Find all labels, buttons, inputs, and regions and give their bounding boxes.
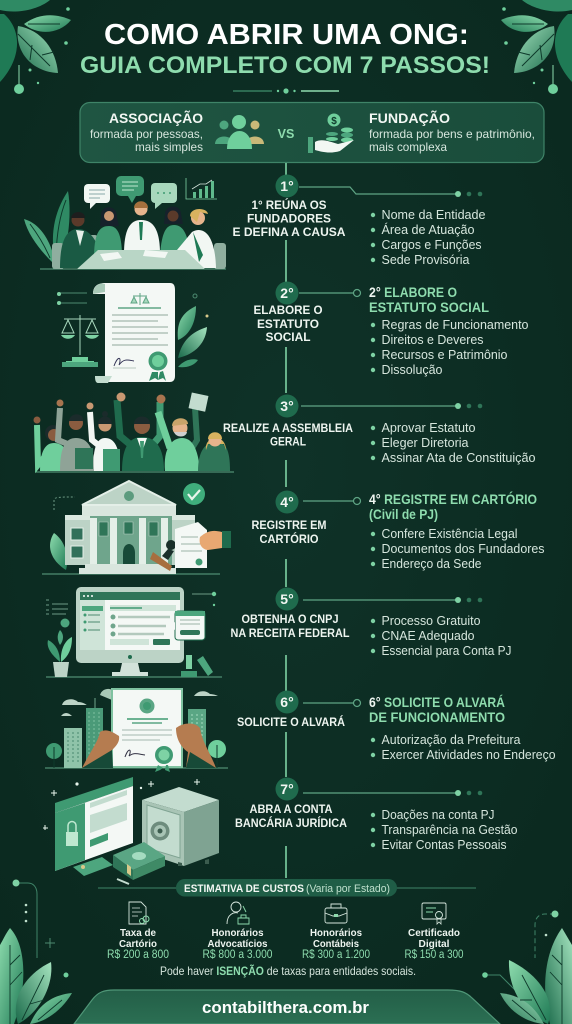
text: step 1 badge and title: 1° [280,178,294,194]
connector: step 3 [301,403,482,409]
text: step 7 badge and title [235,778,347,830]
text: fundação: mais complexa [369,140,447,154]
list: step 5: Processo Gratuito [382,614,481,628]
list: step 3 [371,421,536,465]
heading and list: step 6: Exercer Atividades no Endereço [382,748,556,762]
title [80,19,490,79]
list: step 5: Essencial para Conta PJ [382,644,512,658]
text: step 6 badge and title: SOLICITE O ALVARÁ [237,714,345,729]
cost item: certificado digital: R$ 150 a 300 [404,949,464,961]
title: GUIA COMPLETO COM 7 PASSOS! [80,52,490,79]
list: step 1 [371,208,486,267]
text: step 3 badge and title [223,394,353,448]
text: fundação: FUNDAÇÃO [369,109,450,126]
text: associação: ASSOCIAÇÃO [109,109,203,126]
note: tax exemption: Pode haver ISENÇÃO de taxas para entidades sociais. [160,963,416,978]
decoration: bottom-right leaves [482,910,572,1024]
text: step 6 badge and title [237,690,345,729]
connector: step 7 [303,790,482,796]
heading and list: step 2 [369,284,529,377]
decoration: top-right leaves [501,0,572,94]
cost item: certificado digital: Digital [418,938,450,950]
heading and list: step 2: Dissolução [382,363,443,377]
text: associação [90,109,203,154]
illustration: step 7 bank account and safe [43,777,219,884]
connector: step 5 [303,597,482,603]
text: step 5 badge and title: NA RECEITA FEDERAL [230,626,350,640]
illustration: step 5 computer with cnpj form [46,587,222,677]
heading and list: step 2: 2° ELABORE O [369,284,457,300]
text: step 2 badge and title: ELABORE O [254,303,322,317]
text: step 5 badge and title [230,588,350,640]
illustration: step 2 statute document [57,283,208,383]
text: step 7 badge and title: BANCÁRIA JURÍDICA [235,815,347,830]
illustration: step 6 operating permit [45,689,228,772]
heading and list: step 4: Endereço da Sede [382,557,482,571]
list: step 7: Evitar Contas Pessoais [382,838,506,852]
text: step 2 badge and title [254,282,322,344]
list: step 7 [371,808,518,852]
title: COMO ABRIR UMA ONG: [104,19,469,51]
list: step 1: Cargos e Funções [382,238,482,252]
list: step 1: Sede Provisória [382,253,470,267]
list: step 3: Aprovar Estatuto [382,421,476,435]
cost item: taxa de cartório: R$ 200 a 800 [107,949,169,961]
text: fundação: formada por bens e patrimônio, [369,127,535,141]
cost item: honorários advocatícios: Honorários [212,927,264,939]
cost item: honorários advocatícios: Advocatícios [208,938,268,950]
text: step 2 badge and title: SOCIAL [266,330,310,344]
icon: people [215,115,264,149]
list: step 3: Assinar Ata de Constituição [382,451,536,465]
heading and list: step 2: Regras de Funcionamento [382,318,529,332]
text: step 3 badge and title: GERAL [270,434,306,448]
text: fundação [369,109,535,154]
text: associação: formada por pessoas, [90,127,203,141]
cost item: certificado digital [404,903,464,961]
cost item: honorários contábeis [302,904,370,961]
heading and list: step 6: Autorização da Prefeitura [382,733,521,747]
heading and list: step 2: ESTATUTO SOCIAL [369,299,489,315]
heading and list: step 6: 6° SOLICITE O ALVARÁ [369,694,505,710]
heading: cost estimate: ESTIMATIVA DE CUSTOS [184,883,304,895]
text: step 1 badge and title: 1° REÚNA OS [252,197,326,212]
heading and list: step 4: 4° REGISTRE EM CARTÓRIO [369,490,537,507]
heading and list: step 6 [369,694,556,762]
list: step 7: Doações na conta PJ [382,808,494,822]
list: step 1: Área de Atuação [382,222,475,237]
panel: associação vs fundação [80,102,544,162]
connector: step 1 [299,187,482,197]
heading and list: step 4 [369,490,544,571]
text: step 4 badge and title: 4° [280,494,294,510]
text: step 2 badge and title: 2° [280,285,294,301]
text: step 1 badge and title: FUNDADORES [247,212,331,226]
heading and list: step 4: (Civil de PJ) [369,506,438,522]
list: step 5: CNAE Adequado [382,629,475,643]
cost item: honorários advocatícios: R$ 800 a 3.000 [202,949,272,961]
heading and list: step 4: Confere Existência Legal [382,527,518,541]
cost item: taxa de cartório: Taxa de [120,927,156,939]
list: step 1: Nome da Entidade [382,208,486,222]
title divider [233,88,339,94]
cost item: honorários advocatícios [202,902,272,961]
list: step 5 [371,614,512,658]
heading and list: step 4: Documentos dos Fundadores [382,542,544,556]
cost item: certificado digital: Certificado [408,927,460,939]
illustration: step 4 registry office [42,481,231,574]
heading and list: step 6: DE FUNCIONAMENTO [369,709,505,725]
heading and list: step 2: Recursos e Patrimônio [382,348,508,362]
illustration: step 1 founders meeting [24,176,226,269]
connector: step 2 [299,290,360,296]
text: step 4 badge and title [252,490,326,546]
text: step 6 badge and title: 6° [280,694,294,710]
heading and list: step 2: Direitos e Deveres [382,333,484,347]
decoration: top-left leaves [0,0,71,94]
text: step 1 badge and title: E DEFINA A CAUSA [232,225,346,239]
text: step 1 badge and title [232,174,346,239]
text: step 3 badge and title: REALIZE A ASSEMBLEIA [223,421,353,435]
text: step 7 badge and title: 7° [280,781,294,797]
text: step 2 badge and title: ESTATUTO [257,317,319,331]
text: step 5 badge and title: 5° [280,591,294,607]
cost item: taxa de cartório: Cartório [119,938,157,950]
timeline spine [285,163,287,878]
decoration: bottom-left leaves [0,880,72,1024]
cost item: honorários contábeis: R$ 300 a 1.200 [302,949,370,961]
footer website: contabilthera.com.br [202,998,369,1017]
connector: step 4 [303,498,360,504]
cost item: honorários contábeis: Contábeis [313,938,359,950]
list: step 7: Transparência na Gestão [382,823,518,837]
text: step 7 badge and title: ABRA A CONTA [250,802,333,816]
list: step 3: Eleger Diretoria [382,436,469,450]
heading: cost estimate: (Varia por Estado) [306,883,390,895]
illustration: step 3 general assembly [34,392,234,472]
text: step 4 badge and title: REGISTRE EM [252,518,326,532]
cost item: honorários contábeis: Honorários [310,927,362,939]
text: step 3 badge and title: 3° [280,398,294,414]
text: step 5 badge and title: OBTENHA O CNPJ [242,612,338,626]
cost item: taxa de cartório [107,902,169,961]
connector: step 6 [303,700,360,706]
text: associação: mais simples [135,140,203,154]
footer banner [74,990,500,1024]
text: step 4 badge and title: CARTÓRIO [260,531,318,546]
heading: cost estimate [98,879,476,896]
icon: money in hand: $ [331,116,337,127]
label: vs: VS [278,127,294,141]
icon: money in hand [308,114,354,153]
